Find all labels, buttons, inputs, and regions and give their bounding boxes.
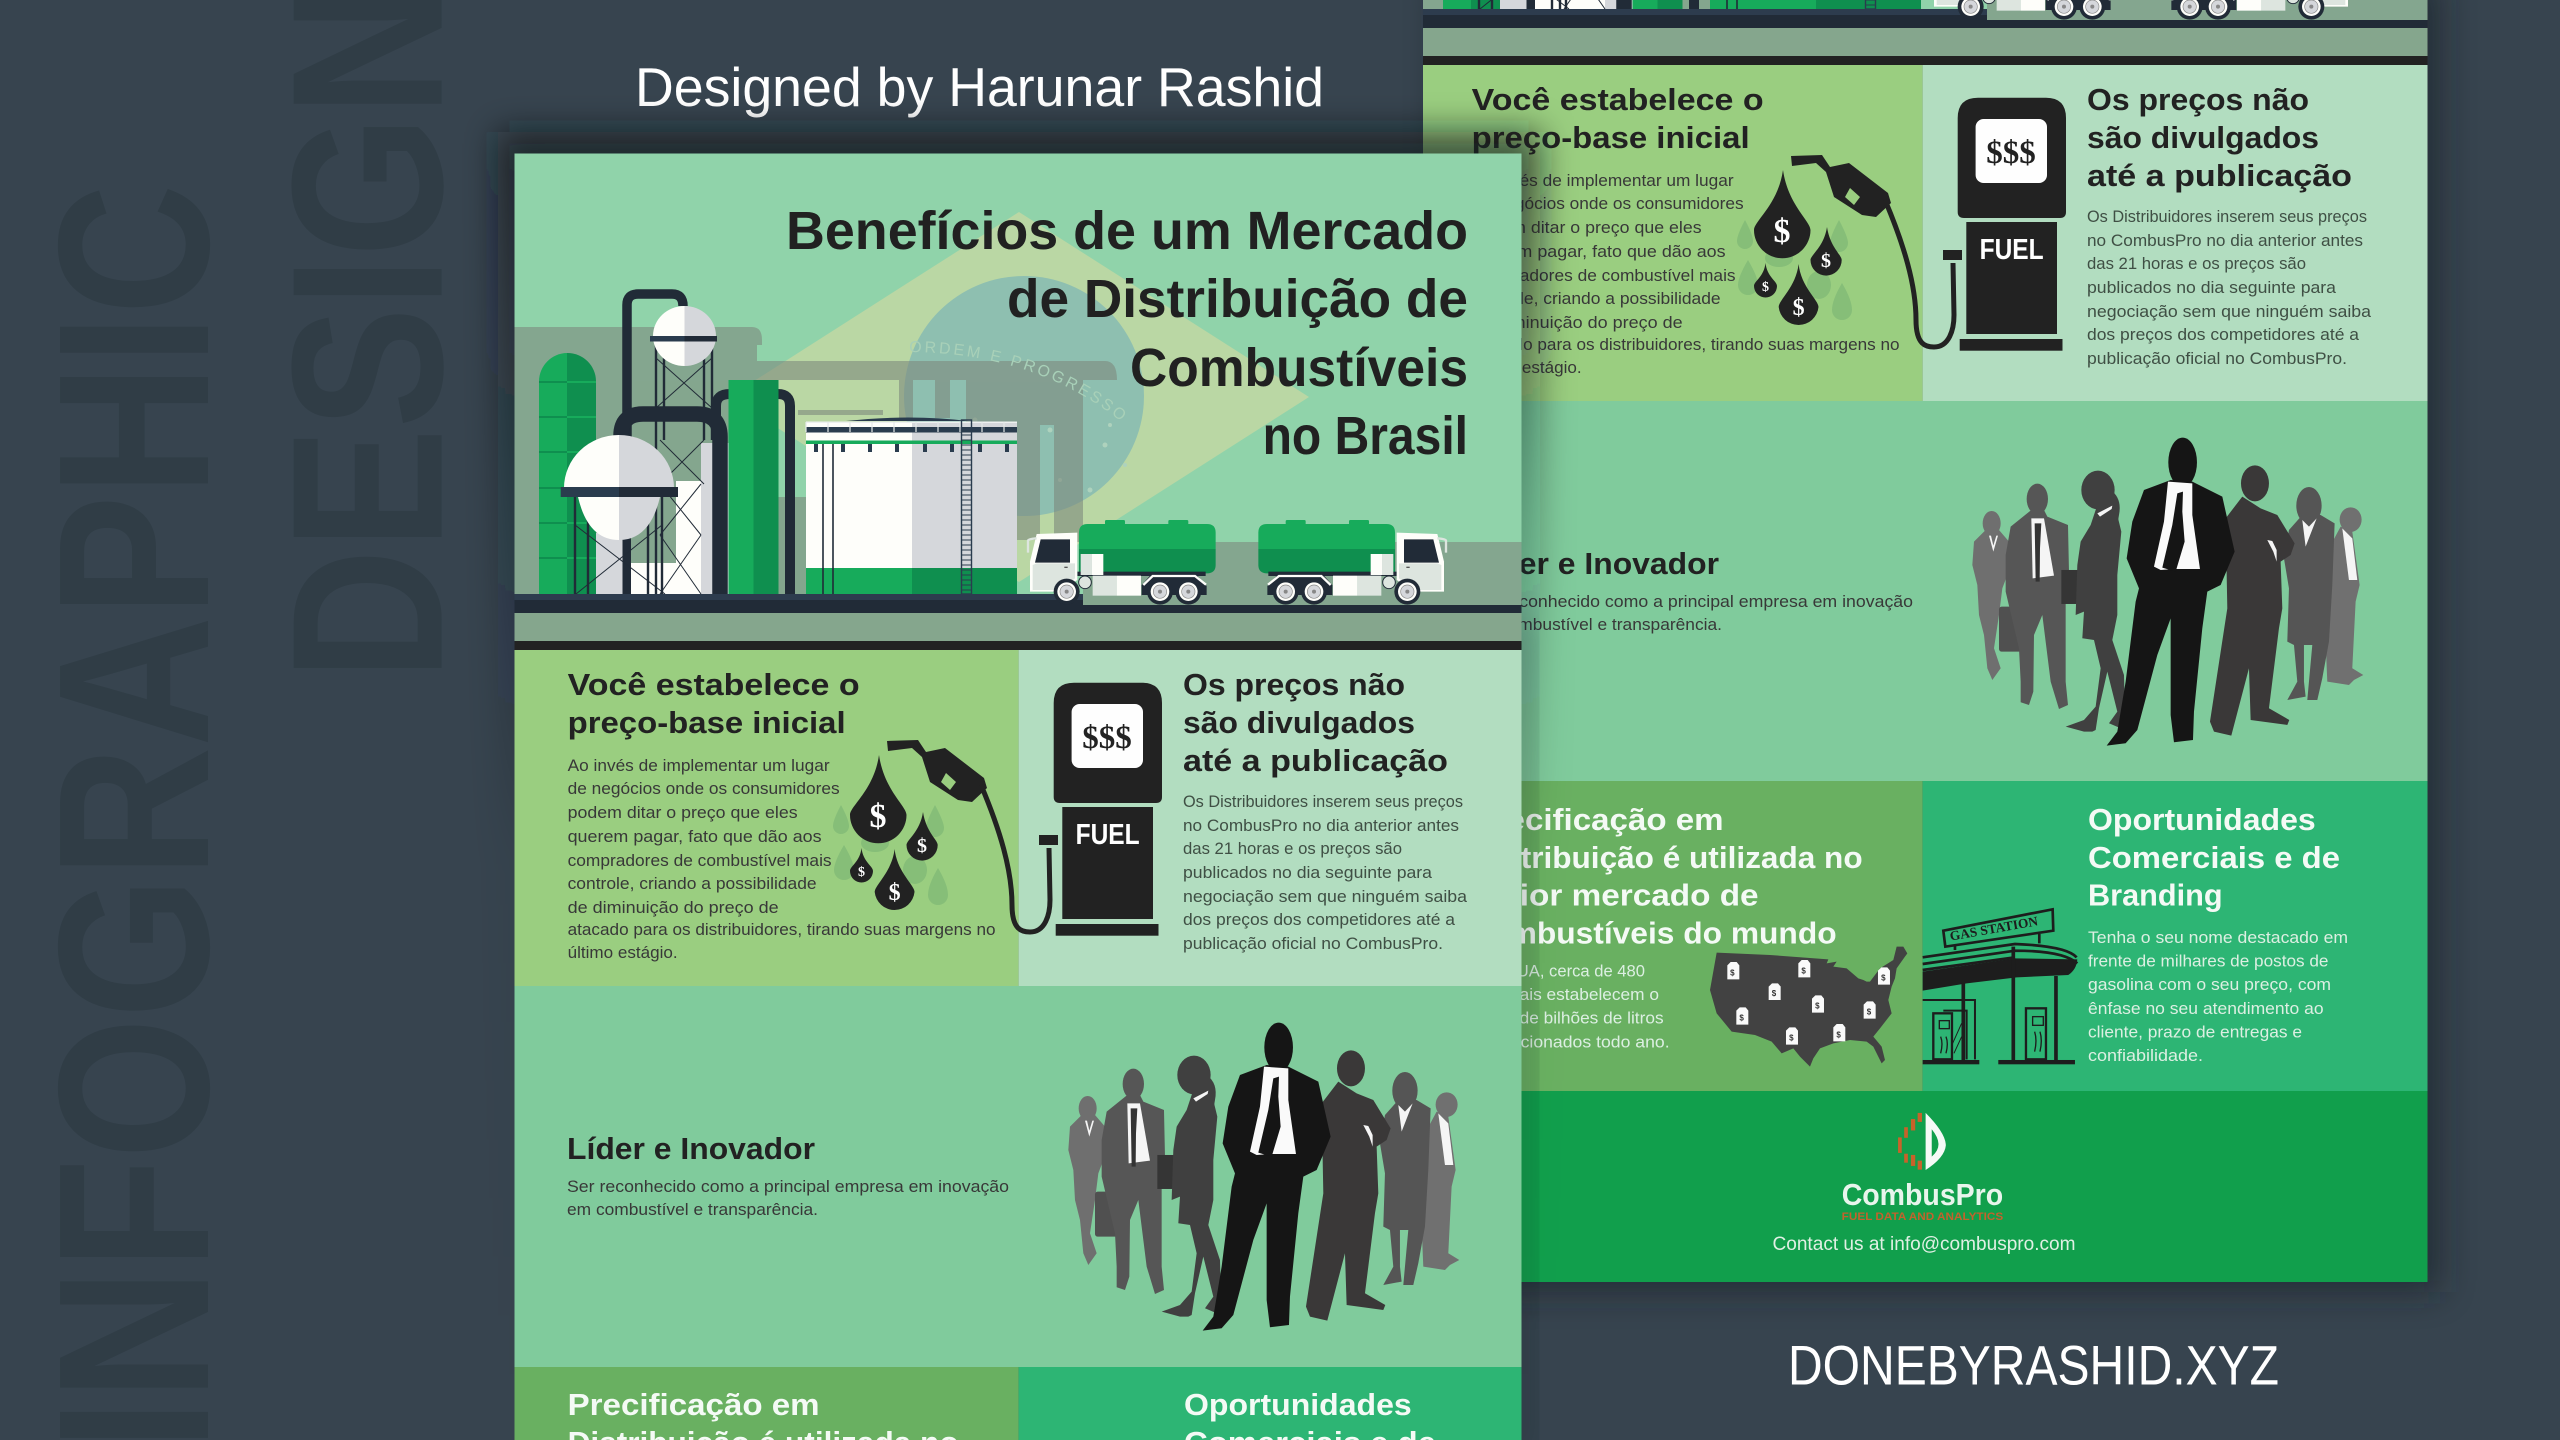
text block: preço-base inicial: preço-base inicial [568, 705, 846, 740]
text block: preço-base inicial: querem pagar, fato que dão aos [568, 827, 822, 846]
back block: preços não divulgados: até a publicação [2087, 158, 2352, 193]
text block: preços não divulgados [1183, 667, 1468, 953]
back block: precificação [1522, 808, 1862, 1048]
back block: preços não divulgados: dos preços dos competidores até a [2087, 325, 2360, 344]
title [786, 201, 1468, 466]
pump and drop labels [858, 720, 1140, 906]
back pump labels: FUEL [1980, 234, 2044, 266]
title: Combustíveis [1130, 338, 1468, 398]
text block: preço-base inicial: Você estabelece o [568, 667, 860, 702]
back block: precificação: Precificação em [1472, 802, 1724, 837]
credit: designed by: Designed by Harunar Rashid [635, 56, 1324, 118]
back block: oportunidades: Oportunidades [2088, 802, 2316, 837]
back block: preços não divulgados: publicação oficial no CombusPro. [2087, 349, 2347, 368]
text block: preço-base inicial: de diminuição do preço de [568, 898, 779, 917]
back block: preço-base: podem ditar o preço que eles [1472, 218, 1702, 237]
text block: preços não divulgados: até a publicação [1183, 743, 1448, 778]
panel: section backgrounds [514, 650, 1522, 1440]
back block: precificação: preço de bilhões de litros [1472, 1009, 1664, 1028]
back block: preço-base: preço-base inicial [1472, 120, 1750, 155]
back block: preço-base: Ao invés de implementar um lugar [1472, 171, 1734, 190]
text block: preços não divulgados: publicados no dia seguinte para [1183, 863, 1433, 882]
back block: preço-base: de diminuição do preço de [1472, 313, 1683, 332]
text block: precificação heading: Precificação em [568, 1387, 820, 1422]
text block: preço-base inicial: controle, criando a possibilidade [568, 874, 817, 893]
back block: preços não divulgados: Os Distribuidores inserem seus preços [2087, 207, 2367, 226]
back panel shadow [1440, 0, 2440, 1292]
back block: preços não divulgados: Os preços não [2087, 82, 2309, 117]
icon: USA map with fuel jugs: $ [1815, 1002, 1820, 1011]
back block: preços não divulgados: no CombusPro no dia anterior antes [2087, 231, 2363, 250]
back pump and drops [1737, 98, 2066, 351]
text block: oportunidades heading: Oportunidades [1184, 1387, 1412, 1422]
back block: líder e inovador [1522, 552, 1912, 634]
back block: preços não divulgados: publicados no dia seguinte para [2087, 278, 2337, 297]
icon: USA map with fuel jugs: $ [1867, 1008, 1872, 1017]
back pump labels: $ [1793, 295, 1805, 321]
icon: USA map with fuel jugs: $ [1836, 1030, 1841, 1039]
icon: USA map with fuel jugs [1710, 947, 1907, 1067]
hero illustration with flag, refinery and trucks [514, 154, 1524, 650]
icon: fuel pump, nozzle and drops [833, 683, 1162, 936]
title: no Brasil [1263, 406, 1468, 466]
icon: USA map with fuel jugs: $ [1881, 974, 1886, 983]
back block: oportunidades [2088, 802, 2348, 1065]
back block: preço-base: atacado para os distribuidores, tirando suas margens no [1472, 335, 1900, 354]
text block: preço-base inicial: Ao invés de implementar um lugar [568, 756, 830, 775]
text block: preço-base inicial: último estágio. [568, 943, 678, 962]
icon: gas station: GAS STATION [1949, 913, 2039, 944]
pump and drop labels: $ [917, 835, 927, 857]
back block: preço-base: querem pagar, fato que dão aos [1472, 242, 1726, 261]
pump and drop labels: FUEL [1076, 819, 1140, 851]
back pump labels: $ [1774, 213, 1790, 250]
footer brand: CombusPro [1842, 1177, 2003, 1212]
pump and drop labels: $ [889, 880, 901, 906]
text block: líder e inovador: Líder e Inovador [567, 1131, 815, 1166]
footer brand [1772, 1177, 2076, 1255]
back block: oportunidades: gasolina com o seu preço, com [2088, 975, 2331, 994]
back block: oportunidades: frente de milhares de postos de [2088, 952, 2328, 970]
text block: preços não divulgados: negociação sem que ninguém saiba [1183, 887, 1468, 906]
back block: precificação: terminais estabelecem o [1472, 985, 1659, 1004]
credit: website: DONEBYRASHID.XYZ [1788, 1334, 2279, 1396]
back block: líder e inovador: Ser reconhecido como a principal empresa em inovação [1471, 592, 1913, 611]
back block: oportunidades: confiabilidade. [2088, 1046, 2203, 1065]
back block: preço-base: de negócios onde os consumidores [1472, 194, 1744, 213]
icon: gas station [1923, 909, 2077, 1064]
text block: preços não divulgados: publicação oficial no CombusPro. [1183, 934, 1443, 953]
back block: oportunidades: Comerciais e de [2088, 840, 2340, 875]
back block: preço-base: último estágio. [1472, 358, 1582, 377]
back block: preço-base: compradores de combustível mais [1472, 266, 1736, 285]
back block: preços não divulgados: das 21 horas e os preços são [2087, 254, 2306, 273]
icon: USA map with fuel jugs: $ [1801, 966, 1806, 975]
back block: preço-base [1472, 82, 1900, 377]
footer brand: FUEL DATA AND ANALYTICS [1842, 1211, 2003, 1223]
title: de Distribuição de [1007, 269, 1468, 329]
back block: precificação: transacionados todo ano. [1472, 1032, 1670, 1051]
pump and drop labels: $$$ [1082, 720, 1132, 756]
text block: preços não divulgados: Os preços não [1183, 667, 1405, 702]
back pump labels: $ [1821, 250, 1831, 272]
back block: oportunidades: cliente, prazo de entregas e [2088, 1023, 2302, 1042]
text block: preço-base inicial: podem ditar o preço que eles [568, 803, 798, 822]
text block: líder e inovador [567, 1131, 1009, 1219]
text block: líder e inovador: Ser reconhecido como a principal empresa em inovação [567, 1177, 1009, 1196]
text block: líder e inovador: em combustível e transparência. [567, 1200, 818, 1219]
text block: preços não divulgados: no CombusPro no dia anterior antes [1183, 816, 1459, 835]
text block: preço-base inicial: atacado para os distribuidores, tirando suas margens no [568, 920, 996, 939]
flag motto: ORDEM E PROGRESSO [910, 341, 1125, 419]
back pump labels: $$$ [1986, 135, 2036, 171]
back block: precificação: maior mercado de [1472, 878, 1759, 913]
text block: preços não divulgados: são divulgados [1183, 705, 1415, 740]
icon: business people silhouettes [1068, 1023, 1459, 1331]
back block: líder e inovador: Líder e Inovador [1471, 546, 1719, 581]
text block: preços não divulgados: dos preços dos competidores até a [1183, 910, 1456, 929]
back block: oportunidades: Branding [2088, 878, 2223, 913]
back hero strip [1418, 0, 2428, 65]
back block: líder e inovador: em combustível e transparência. [1471, 615, 1722, 634]
back block: preço-base: controle, criando a possibilidade [1472, 289, 1721, 308]
front panel shadow [498, 132, 1540, 1440]
title: Benefícios de um Mercado [786, 201, 1468, 261]
pump and drop labels: $ [858, 865, 865, 880]
icon: USA map with fuel jugs: $ [1772, 989, 1777, 998]
icon: USA map with fuel jugs: $ [1730, 968, 1735, 977]
panel: back poster [1418, 0, 2429, 1283]
back block: oportunidades: ênfase no seu atendimento ao [2088, 999, 2324, 1018]
back pump labels: $ [1762, 280, 1769, 295]
text block: preço-base inicial: compradores de combustível mais [568, 851, 832, 870]
back block: preços não divulgados: negociação sem que ninguém saiba [2087, 302, 2372, 321]
back block: oportunidades: Tenha o seu nome destacado em [2088, 928, 2348, 947]
back section backgrounds [1418, 65, 2429, 1283]
pump and drop labels: $ [870, 798, 886, 835]
text block: precificação heading [570, 1393, 956, 1440]
text block: preço-base inicial: de negócios onde os consumidores [568, 779, 840, 798]
text block: preço-base inicial [568, 667, 996, 962]
icon: USA map with fuel jugs: $ [1789, 1034, 1794, 1043]
back pump labels [1762, 135, 2044, 321]
back block: precificação: Nos EUA, cerca de 480 [1472, 961, 1645, 980]
panel: front poster [514, 154, 1522, 1440]
back people silhouettes [1972, 438, 2363, 746]
text block: oportunidades heading [1185, 1393, 1434, 1440]
footer logo [1898, 1113, 1946, 1170]
text block: preços não divulgados: das 21 horas e os preços são [1183, 839, 1402, 858]
footer brand: Contact us at info@combuspro.com [1772, 1234, 2076, 1255]
back block: preço-base: Você estabelece o [1472, 82, 1764, 117]
back block: precificação: Distribuição é utilizada no [1472, 840, 1863, 875]
text block: preços não divulgados: Os Distribuidores inserem seus preços [1183, 792, 1463, 811]
icon: USA map with fuel jugs: $ [1739, 1014, 1744, 1023]
back block: preços não divulgados: são divulgados [2087, 120, 2319, 155]
back block: preços não divulgados [2087, 82, 2372, 368]
back block: precificação: combustíveis do mundo [1472, 916, 1837, 951]
